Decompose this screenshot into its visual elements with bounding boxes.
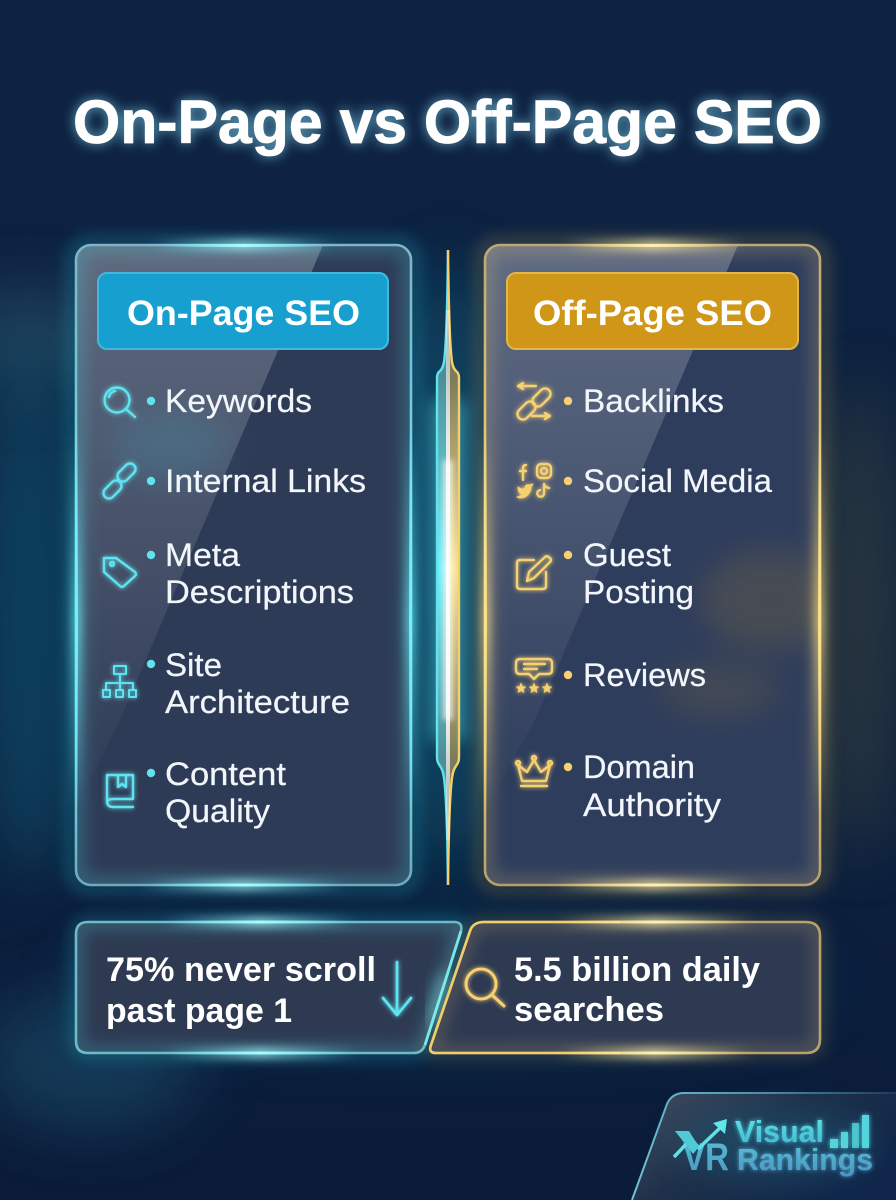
item: Keywords: Keywords bbox=[165, 383, 312, 419]
item: Meta Descriptions: Descriptions bbox=[165, 574, 354, 610]
item: Domain Authority bbox=[516, 749, 722, 823]
item: Reviews: Reviews bbox=[583, 657, 706, 693]
item: Social Media: Social Media bbox=[583, 463, 773, 499]
item: Internal Links: Internal Links bbox=[165, 463, 366, 499]
logo bars bbox=[830, 1115, 869, 1148]
item: Meta Descriptions: Meta bbox=[165, 537, 241, 573]
item: Site Architecture bbox=[103, 647, 350, 720]
stat text: 5.5 billion daily bbox=[514, 951, 760, 989]
item: Domain Authority: Authority bbox=[583, 787, 722, 823]
heading pill: Off-Page SEO bbox=[507, 273, 798, 349]
item: Internal Links bbox=[101, 461, 366, 501]
stat text: 75% never scroll bbox=[106, 951, 376, 989]
item: Guest Posting: Posting bbox=[583, 574, 694, 610]
item: Reviews bbox=[516, 657, 706, 693]
heading pill: Off-Page SEO: Off-Page SEO bbox=[533, 294, 772, 333]
item: Content Quality: Content bbox=[165, 756, 286, 792]
item: Meta Descriptions bbox=[104, 537, 354, 610]
icon: magnifier bbox=[466, 969, 504, 1006]
logo wordmark: Visual bbox=[735, 1114, 824, 1149]
item: Site Architecture: Architecture bbox=[165, 684, 350, 720]
panel: on-page SEO bbox=[72, 241, 415, 889]
item: Content Quality: Quality bbox=[165, 793, 271, 829]
logo wordmark bbox=[735, 1114, 873, 1177]
item: Content Quality bbox=[107, 756, 286, 829]
title: On-Page vs Off-Page SEO bbox=[73, 88, 822, 156]
stat card: 75% never scroll past page 1 bbox=[76, 918, 461, 1057]
item: Domain Authority: Domain bbox=[583, 749, 695, 785]
logo mark: VR with rising arrow bbox=[674, 1119, 729, 1179]
logo mark: VR with rising arrow: VR bbox=[683, 1136, 729, 1179]
item: Backlinks bbox=[515, 383, 724, 422]
item: Guest Posting: Guest bbox=[583, 537, 671, 573]
item: Site Architecture: Site bbox=[165, 647, 222, 683]
logo wordmark: Rankings bbox=[737, 1142, 873, 1177]
heading pill: On-Page SEO: On-Page SEO bbox=[127, 294, 360, 333]
stat card: 5.5 billion daily searches bbox=[430, 918, 820, 1057]
center divider bbox=[430, 250, 466, 885]
stat text: searches bbox=[514, 991, 664, 1029]
heading pill: On-Page SEO bbox=[98, 273, 388, 349]
stat text: past page 1 bbox=[106, 992, 292, 1030]
icon: down arrow bbox=[383, 962, 411, 1015]
item: Keywords bbox=[104, 383, 312, 419]
logo badge: Visual Rankings bbox=[632, 1093, 896, 1200]
item: Guest Posting bbox=[517, 537, 694, 610]
item: Backlinks: Backlinks bbox=[583, 383, 724, 419]
panel: off-page SEO bbox=[481, 241, 840, 889]
